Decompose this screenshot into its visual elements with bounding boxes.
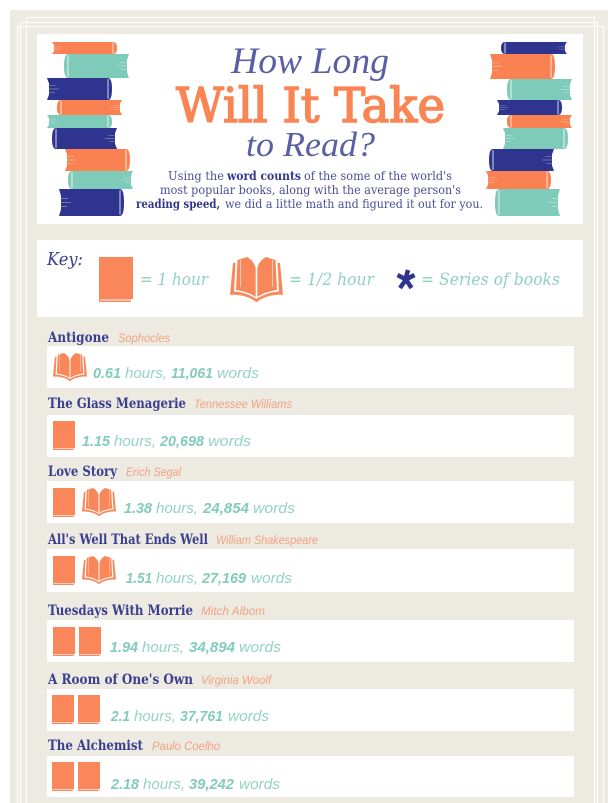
row: A Room of One's Own: words <box>228 708 270 725</box>
row: Antigone: words <box>217 365 260 382</box>
row: The Alchemist: 2.18 <box>110 776 140 793</box>
intro text <box>136 169 483 211</box>
intro text: of the some of the world's <box>304 169 452 183</box>
row: The Glass Menagerie: 20,698 <box>159 433 205 450</box>
row: Love Story: hours, <box>156 500 198 517</box>
row: A Room of One's Own: A Room of One's Own <box>47 672 193 688</box>
intro text: we did a little math and figured it out for you. <box>225 197 483 211</box>
row: The Alchemist <box>47 738 574 797</box>
row: The Alchemist: 39,242 <box>189 776 235 793</box>
icon: asterisk <box>398 270 414 288</box>
row: A Room of One's Own: 2.1 <box>110 708 130 725</box>
key: half hour: = 1/2 hour <box>289 270 375 290</box>
icon: right book stack <box>486 42 572 216</box>
row: Love Story <box>47 464 574 523</box>
intro text: Using the <box>168 169 224 183</box>
row: Antigone: Antigone <box>47 330 109 346</box>
row: Tuesdays With Morrie: 34,894 <box>189 639 236 656</box>
row: The Alchemist: words <box>239 776 281 793</box>
row: A Room of One's Own: Virginia Woolf <box>201 675 273 687</box>
title <box>176 41 445 164</box>
row: All's Well That Ends Well: All's Well That Ends Well <box>47 532 208 548</box>
row: All's Well That Ends Well: 1.51 <box>126 570 152 587</box>
row: Antigone: hours, <box>125 365 167 382</box>
intro text: most popular books, along with the average person's <box>160 183 461 197</box>
key: series: = Series of books <box>421 270 560 290</box>
row: Tuesdays With Morrie <box>47 603 574 662</box>
row: Love Story: 1.38 <box>124 500 153 517</box>
row: Tuesdays With Morrie: words <box>239 639 282 656</box>
row: The Glass Menagerie <box>47 396 574 457</box>
row: The Glass Menagerie: 1.15 <box>82 433 111 450</box>
title: Will It Take <box>176 78 445 134</box>
intro text: reading speed, <box>136 197 220 211</box>
row: The Glass Menagerie: The Glass Menagerie <box>48 396 186 412</box>
row: The Alchemist: Paulo Coelho <box>152 741 221 753</box>
row: The Glass Menagerie: words <box>208 433 252 450</box>
icon: open book <box>230 257 283 302</box>
row: A Room of One's Own <box>47 672 574 731</box>
row: Antigone: 11,061 <box>171 365 213 382</box>
row: Tuesdays With Morrie: Mitch Albom <box>201 606 265 618</box>
row: Antigone: Sophocles <box>118 333 170 345</box>
panel: header <box>37 34 583 224</box>
row: The Alchemist: The Alchemist <box>48 738 144 754</box>
row: Love Story: words <box>253 500 296 517</box>
row: The Glass Menagerie: hours, <box>114 433 156 450</box>
row: All's Well That Ends Well: hours, <box>156 570 198 587</box>
row: Love Story: 24,854 <box>202 500 250 517</box>
panel: key <box>37 240 583 317</box>
row: Tuesdays With Morrie: hours, <box>142 639 184 656</box>
row: Antigone: 0.61 <box>93 365 121 382</box>
row: The Alchemist: hours, <box>143 776 185 793</box>
row: A Room of One's Own: 37,761 <box>180 708 223 725</box>
row: Antigone <box>47 330 574 388</box>
row: The Glass Menagerie: Tennessee Williams <box>194 399 292 411</box>
key: one hour: = 1 hour <box>140 270 209 290</box>
row: A Room of One's Own: hours, <box>134 708 176 725</box>
row: All's Well That Ends Well <box>47 532 574 592</box>
row: Tuesdays With Morrie: 1.94 <box>110 639 139 656</box>
key heading: Key: <box>46 249 83 270</box>
row: All's Well That Ends Well: William Shakespeare <box>216 535 318 547</box>
row: Love Story: Love Story <box>48 464 118 480</box>
row: All's Well That Ends Well: words <box>251 570 293 587</box>
row: Tuesdays With Morrie: Tuesdays With Morrie <box>48 603 193 619</box>
row: Love Story: Erich Segal <box>126 467 181 479</box>
intro text: word counts <box>226 169 301 183</box>
title: How Long <box>230 41 389 82</box>
title: to Read? <box>246 125 376 164</box>
icon: left book stack <box>47 42 133 216</box>
icon: closed book <box>99 257 133 302</box>
row: All's Well That Ends Well: 27,169 <box>201 570 247 587</box>
